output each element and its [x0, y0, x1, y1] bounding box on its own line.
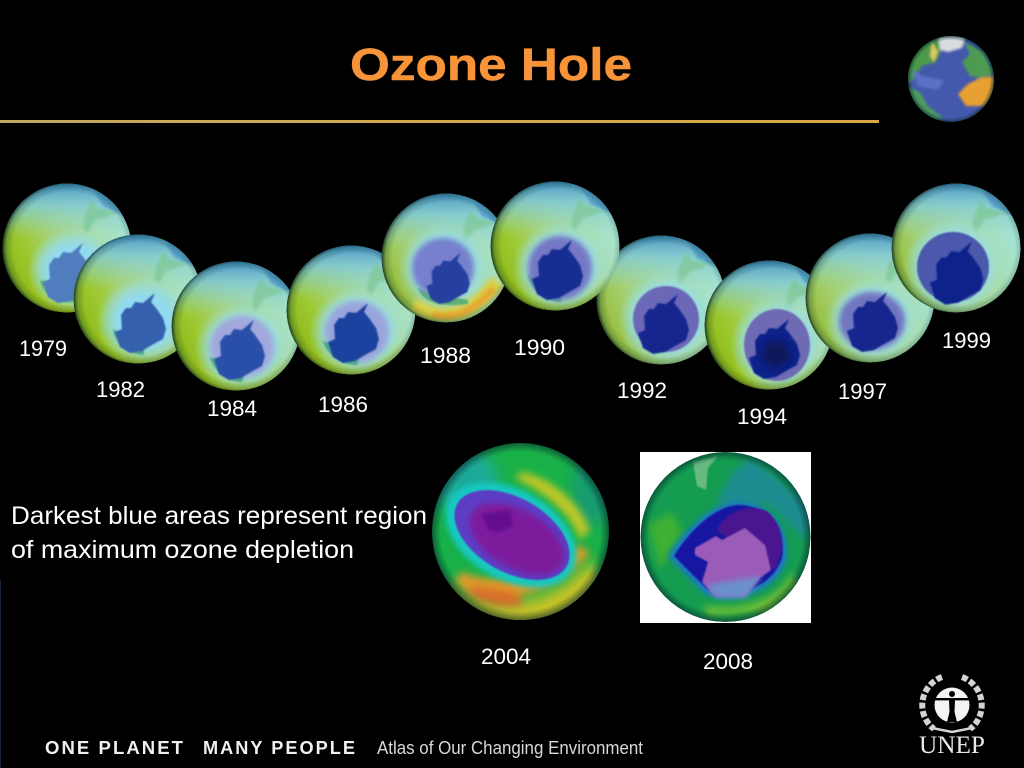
year label 2004: 2004	[481, 644, 531, 669]
globe 1986	[286, 246, 416, 377]
globe 2004	[432, 443, 609, 620]
globe 1999	[892, 184, 1020, 316]
footer tagline: ONE PLANET	[45, 738, 185, 758]
title: Ozone Hole	[350, 39, 632, 90]
year label 1979: 1979	[19, 336, 67, 361]
year label 1990: 1990	[514, 335, 565, 360]
globe 1990	[490, 182, 620, 314]
caption text: of maximum ozone depletion	[11, 536, 354, 564]
globe 1997	[806, 234, 934, 364]
globe 1992	[596, 236, 726, 366]
year label 1997: 1997	[838, 379, 887, 404]
caption text: Darkest blue areas represent region	[11, 502, 427, 530]
globe 1988	[382, 194, 510, 322]
year label 1999: 1999	[942, 328, 991, 353]
globe 1994	[704, 260, 834, 394]
globe 1979	[2, 184, 132, 312]
year label 1994: 1994	[737, 404, 787, 429]
caption text	[11, 502, 427, 564]
UNEP logo: UNEP	[919, 732, 985, 759]
footer tagline	[45, 738, 643, 758]
year label 1992: 1992	[617, 378, 667, 403]
year label 1982: 1982	[96, 377, 145, 402]
year label 1984: 1984	[207, 396, 257, 421]
globe 2008 on white square	[640, 452, 815, 623]
footer tagline: Atlas of Our Changing Environment	[377, 738, 643, 758]
year label 1986: 1986	[318, 392, 368, 417]
globe 1982	[74, 234, 202, 366]
year label 1988: 1988	[420, 343, 471, 368]
UNEP logo	[919, 677, 985, 759]
icon: small Earth globe	[906, 36, 996, 124]
globe 1984	[172, 262, 300, 393]
footer tagline: MANY PEOPLE	[203, 738, 357, 758]
year label 2008: 2008	[703, 649, 753, 674]
